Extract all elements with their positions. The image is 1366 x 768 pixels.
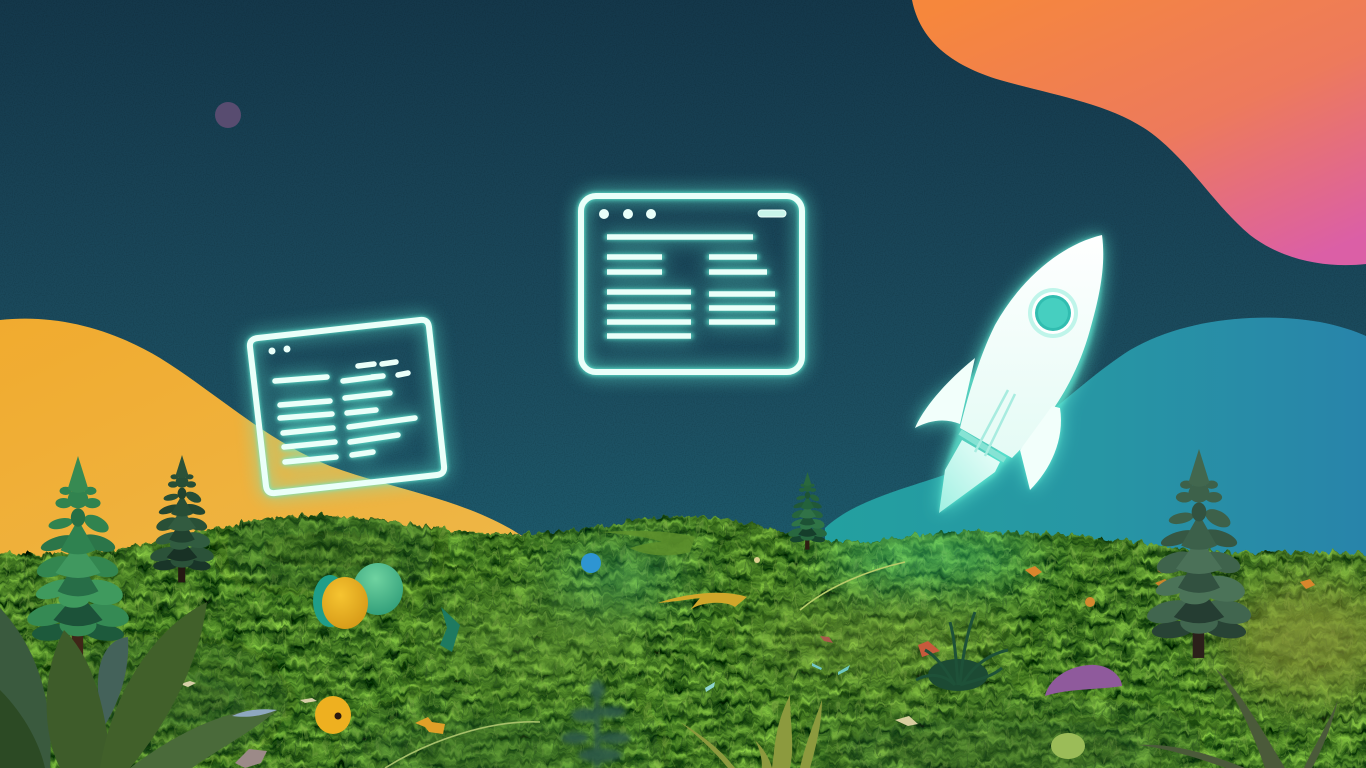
rocket porthole [1028,288,1078,338]
right upright leaf [100,602,207,768]
rocket nozzle band [960,432,1005,460]
leaf highlight [232,709,277,717]
small purple planet [215,102,241,128]
rocket flame [939,440,1000,513]
yellow ball with hole [315,696,351,734]
small blurred shrub, foreground [561,680,631,768]
large leafy plant, bottom left [0,602,277,768]
tall yellow-green grass blades, bottom centre [680,695,822,768]
curved grass stem [800,562,905,610]
back leaf blue-grey [98,637,128,725]
grass tuft pattern [0,500,1366,768]
yellow hill, left [0,319,525,580]
tilted window outline and code lines [250,320,444,493]
window glow [581,196,802,372]
dark blades, bottom right [1138,668,1338,768]
teal egg behind [313,575,347,627]
lower left leaf [0,690,45,768]
yellow and green eggs [313,563,403,629]
foreground tree: left [25,456,131,660]
teal hill, right [825,318,1366,600]
foreground tree: right [1145,449,1253,658]
rocket body [960,235,1103,458]
purple dome [1045,665,1122,696]
window outline and code lines [581,196,802,372]
glowing code window, tilted left [250,320,444,493]
grass hill [0,500,1366,768]
small teal leaf object [440,607,460,652]
yellow egg [322,577,368,629]
grass light and shadow patches [40,528,1366,768]
back leaf left [0,608,51,768]
sky grain texture [0,0,1366,600]
golden fallen leaf [658,593,747,610]
left fin [915,358,975,428]
rocket glow [915,235,1103,513]
grass blade texture [0,500,1366,768]
blue ball [581,553,601,573]
curved grass stem foreground [385,722,540,768]
glowing code window, centre [581,196,802,372]
tilted window glow [250,320,444,493]
glowing rocket [915,235,1103,513]
orange-pink blob, top right [912,0,1366,265]
scattered colourful debris [180,557,1315,768]
small spiky plant [916,612,1008,691]
rocket body seam [975,390,1015,456]
green egg [353,563,403,615]
tree: back centre [787,472,828,550]
low right leaf [130,709,277,768]
pale green egg [1051,733,1085,759]
right fin [1020,406,1061,490]
centre leaf [47,630,112,768]
grass base colour [0,512,1366,558]
green debris on the ridge [600,531,695,555]
tree: back left [149,455,215,582]
